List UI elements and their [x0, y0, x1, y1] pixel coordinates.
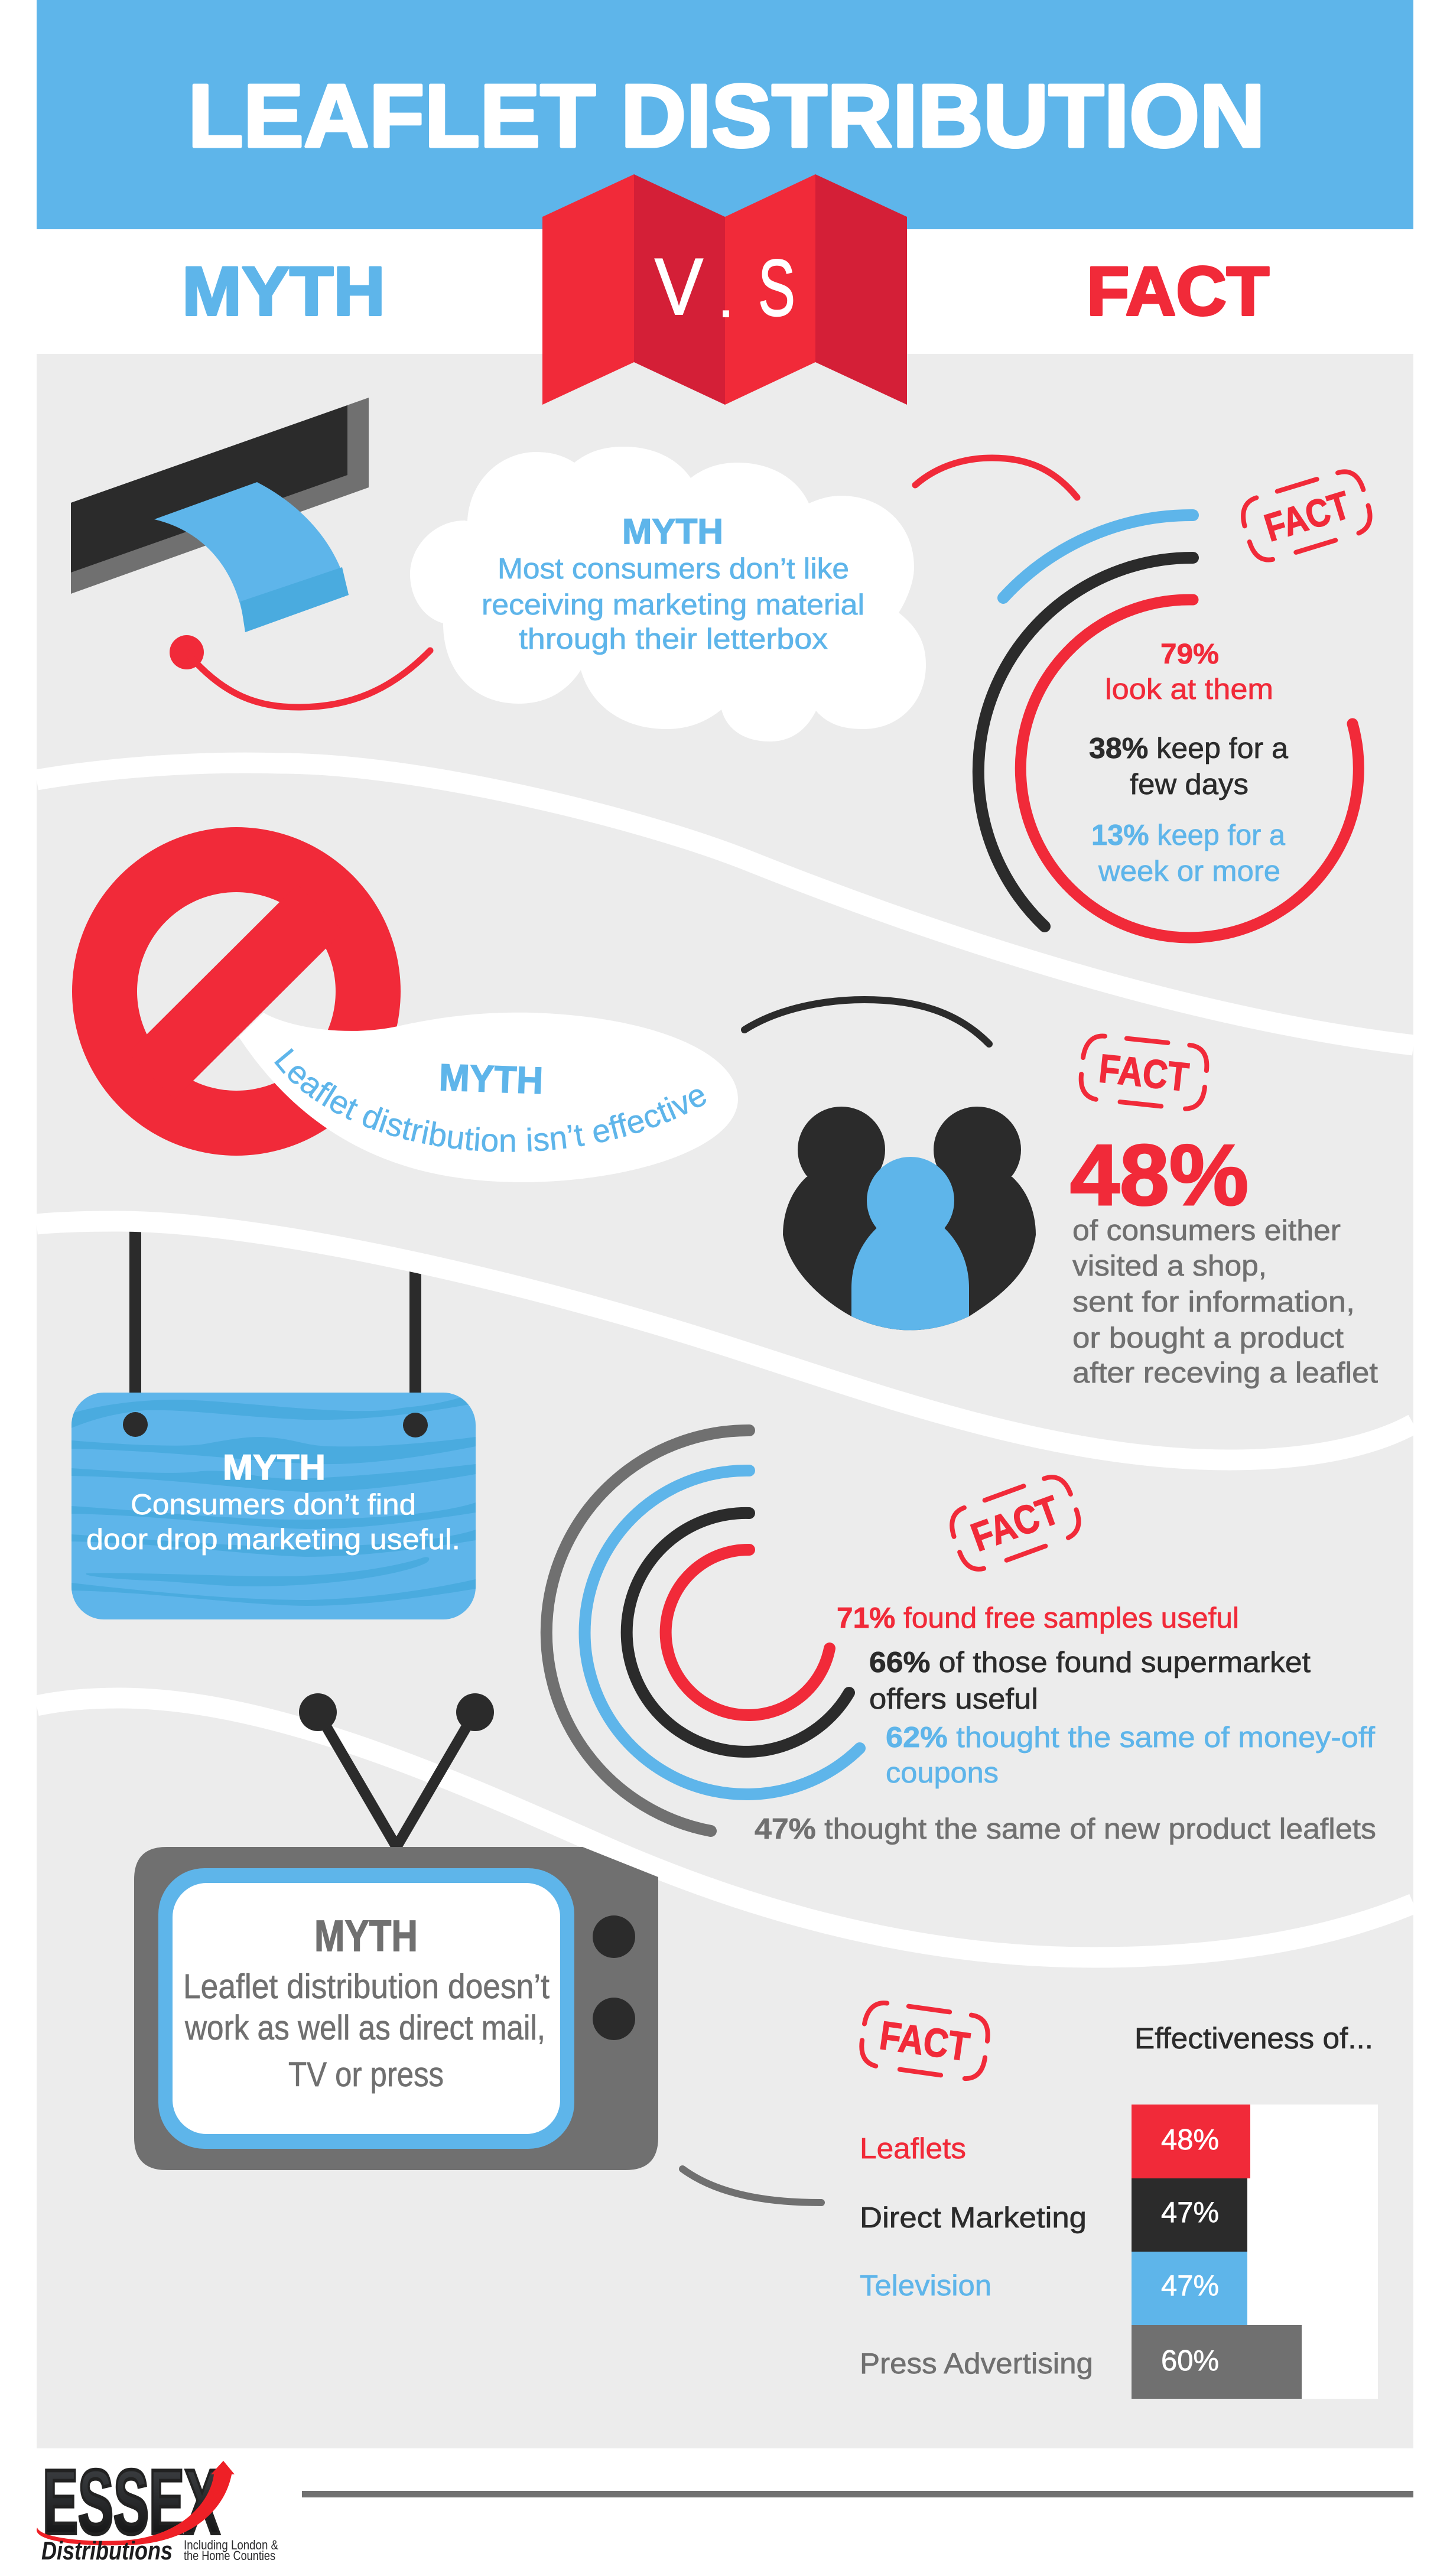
bar: leaflets 48%: 48% [1161, 2124, 1219, 2156]
icon: group of people [783, 1107, 1036, 1331]
bar: press advertising 60%: Press Advertising [860, 2348, 1093, 2380]
bar: direct marketing 47%: 47% [1161, 2197, 1219, 2229]
tv set body [134, 1847, 658, 2170]
myth heading 2: MYTH [438, 1056, 544, 1102]
heading: fact: FACT [1087, 252, 1269, 330]
sign board [71, 1393, 476, 1619]
myth text 1 [482, 512, 864, 655]
myth text 4 [183, 1911, 550, 2094]
red arc 71% [666, 1550, 830, 1715]
speech blob [239, 1013, 738, 1182]
myth text 1: Most consumers don’t like [498, 553, 849, 585]
radial chart 2 labels: offers useful [869, 1683, 1038, 1715]
heading: myth: MYTH [182, 252, 385, 330]
logo: essex distributions: ESSEX [43, 2451, 220, 2553]
radial chart 2 labels [755, 1602, 1376, 1845]
bar: press advertising 60% [860, 2325, 1302, 2399]
hanging pins [123, 1412, 428, 1437]
wood grain [71, 1396, 476, 1606]
panel: myth 2 no sign [72, 827, 738, 1182]
stat description: visited a shop, [1072, 1250, 1267, 1282]
myth text 4: TV or press [288, 2055, 444, 2094]
bar: leaflets 48% [860, 2105, 1250, 2178]
panel: myth 1 letterbox [71, 398, 926, 741]
myth text 1: through their letterbox [519, 623, 828, 655]
myth text 1: MYTH [622, 512, 723, 551]
radial chart 2 labels: 66% of those found supermarket [869, 1647, 1311, 1679]
fact stamp 4: FACT [877, 2013, 972, 2070]
radial chart 2 labels: 47% thought the same of new product leaflets [755, 1813, 1376, 1845]
black arc 2 [744, 1000, 989, 1044]
curved myth text: Leaflet distribution isn’t effective [274, 1048, 706, 1152]
myth text 1: receiving marketing material [482, 589, 864, 621]
black arc 38% [978, 558, 1193, 926]
black arc 66% [627, 1513, 849, 1752]
icon: folded map v.s: V [655, 242, 703, 331]
stat description: of consumers either [1072, 1215, 1341, 1247]
bar: television 47%: 47% [1161, 2270, 1219, 2302]
myth text 3 [86, 1448, 460, 1556]
blue arc 62% [585, 1471, 860, 1794]
logo: essex distributions: the Home Counties [184, 2548, 275, 2563]
myth text 4: Leaflet distribution doesn’t [183, 1967, 550, 2006]
bar: television 47%: Television [860, 2270, 991, 2302]
panel: myth 3 hanging sign [71, 1393, 476, 1619]
myth text 3: door drop marketing useful. [86, 1524, 460, 1556]
red arc 79% [1020, 600, 1358, 938]
fact stamp 3: FACT [965, 1487, 1065, 1560]
logo: essex distributions [37, 2451, 278, 2565]
fact stamp 1 [1238, 467, 1375, 564]
stat 48%: 48% [1070, 1127, 1249, 1223]
tv antenna [299, 1693, 494, 1847]
fact stamp 2 [1079, 1034, 1209, 1111]
myth text 3: Consumers don’t find [131, 1489, 416, 1521]
bar: direct marketing 47%: Direct Marketing [860, 2202, 1087, 2234]
myth text 3: MYTH [223, 1448, 326, 1487]
radial chart 1 [978, 515, 1358, 938]
red connector with dot [170, 635, 430, 707]
bar: press advertising 60%: 60% [1161, 2345, 1219, 2377]
fact stamp 2: FACT [1097, 1046, 1191, 1100]
stat description: sent for information, [1072, 1286, 1355, 1318]
red arc 1 [915, 458, 1077, 497]
blue arc 13% [1003, 515, 1193, 598]
icon: prohibition sign [72, 827, 401, 1156]
bar chart: effectiveness [860, 2105, 1378, 2399]
tv knobs [593, 1915, 635, 2040]
icon: folded map v.s: . [719, 269, 733, 328]
cloud bubble [410, 447, 926, 741]
grey main panel [37, 354, 1413, 2448]
fact stamp 4 [859, 2001, 990, 2081]
logo: essex distributions: Including London & [184, 2538, 278, 2552]
grey arc 47% [547, 1430, 749, 1831]
fact stamp 3 [946, 1472, 1084, 1575]
stat description [1072, 1215, 1378, 1389]
wave divider 1 [37, 763, 1413, 1045]
radial chart 2 [547, 1430, 860, 1831]
bar: television 47% [860, 2252, 1247, 2325]
bar: direct marketing 47% [860, 2178, 1247, 2252]
radial chart 2 labels: 71% found free samples useful [837, 1602, 1239, 1634]
radial chart labels [1089, 639, 1289, 887]
sign hanging strings [129, 1223, 421, 1425]
bar: leaflets 48%: Leaflets [860, 2133, 966, 2165]
myth text 4: MYTH [314, 1911, 418, 1960]
myth text 4: work as well as direct mail, [184, 2009, 545, 2047]
radial chart labels: 13% keep for a [1091, 819, 1286, 851]
panel: myth 4 television [134, 1693, 658, 2170]
footer rule [302, 2491, 1413, 2497]
radial chart labels: look at them [1105, 674, 1273, 705]
radial chart 2 labels: coupons [886, 1757, 999, 1789]
title: LEAFLET DISTRIBUTION [188, 66, 1265, 165]
wave divider 2 [37, 1221, 1413, 1460]
tv screen [158, 1868, 574, 2149]
icon: folded map v.s: S [758, 243, 795, 333]
radial chart labels: few days [1130, 769, 1249, 801]
chart title: Effectiveness of... [1134, 2022, 1373, 2055]
fact stamp 1: FACT [1260, 483, 1355, 549]
stat description: after receving a leaflet [1072, 1357, 1378, 1389]
radial chart labels: 38% keep for a [1089, 733, 1289, 765]
logo: essex distributions: Distributions [41, 2536, 173, 2565]
header band [37, 0, 1413, 229]
radial chart 2 labels: 62% thought the same of money-off [886, 1722, 1375, 1754]
grey connector arc [682, 2169, 821, 2203]
radial chart labels: week or more [1098, 856, 1280, 887]
stat description: or bought a product [1072, 1322, 1344, 1354]
icon: letterbox [71, 398, 369, 594]
wave divider 3 [37, 1698, 1413, 1957]
radial chart labels: 79% [1160, 639, 1219, 670]
icon: folded map v.s [542, 174, 907, 405]
icon: leaflet [154, 482, 349, 632]
